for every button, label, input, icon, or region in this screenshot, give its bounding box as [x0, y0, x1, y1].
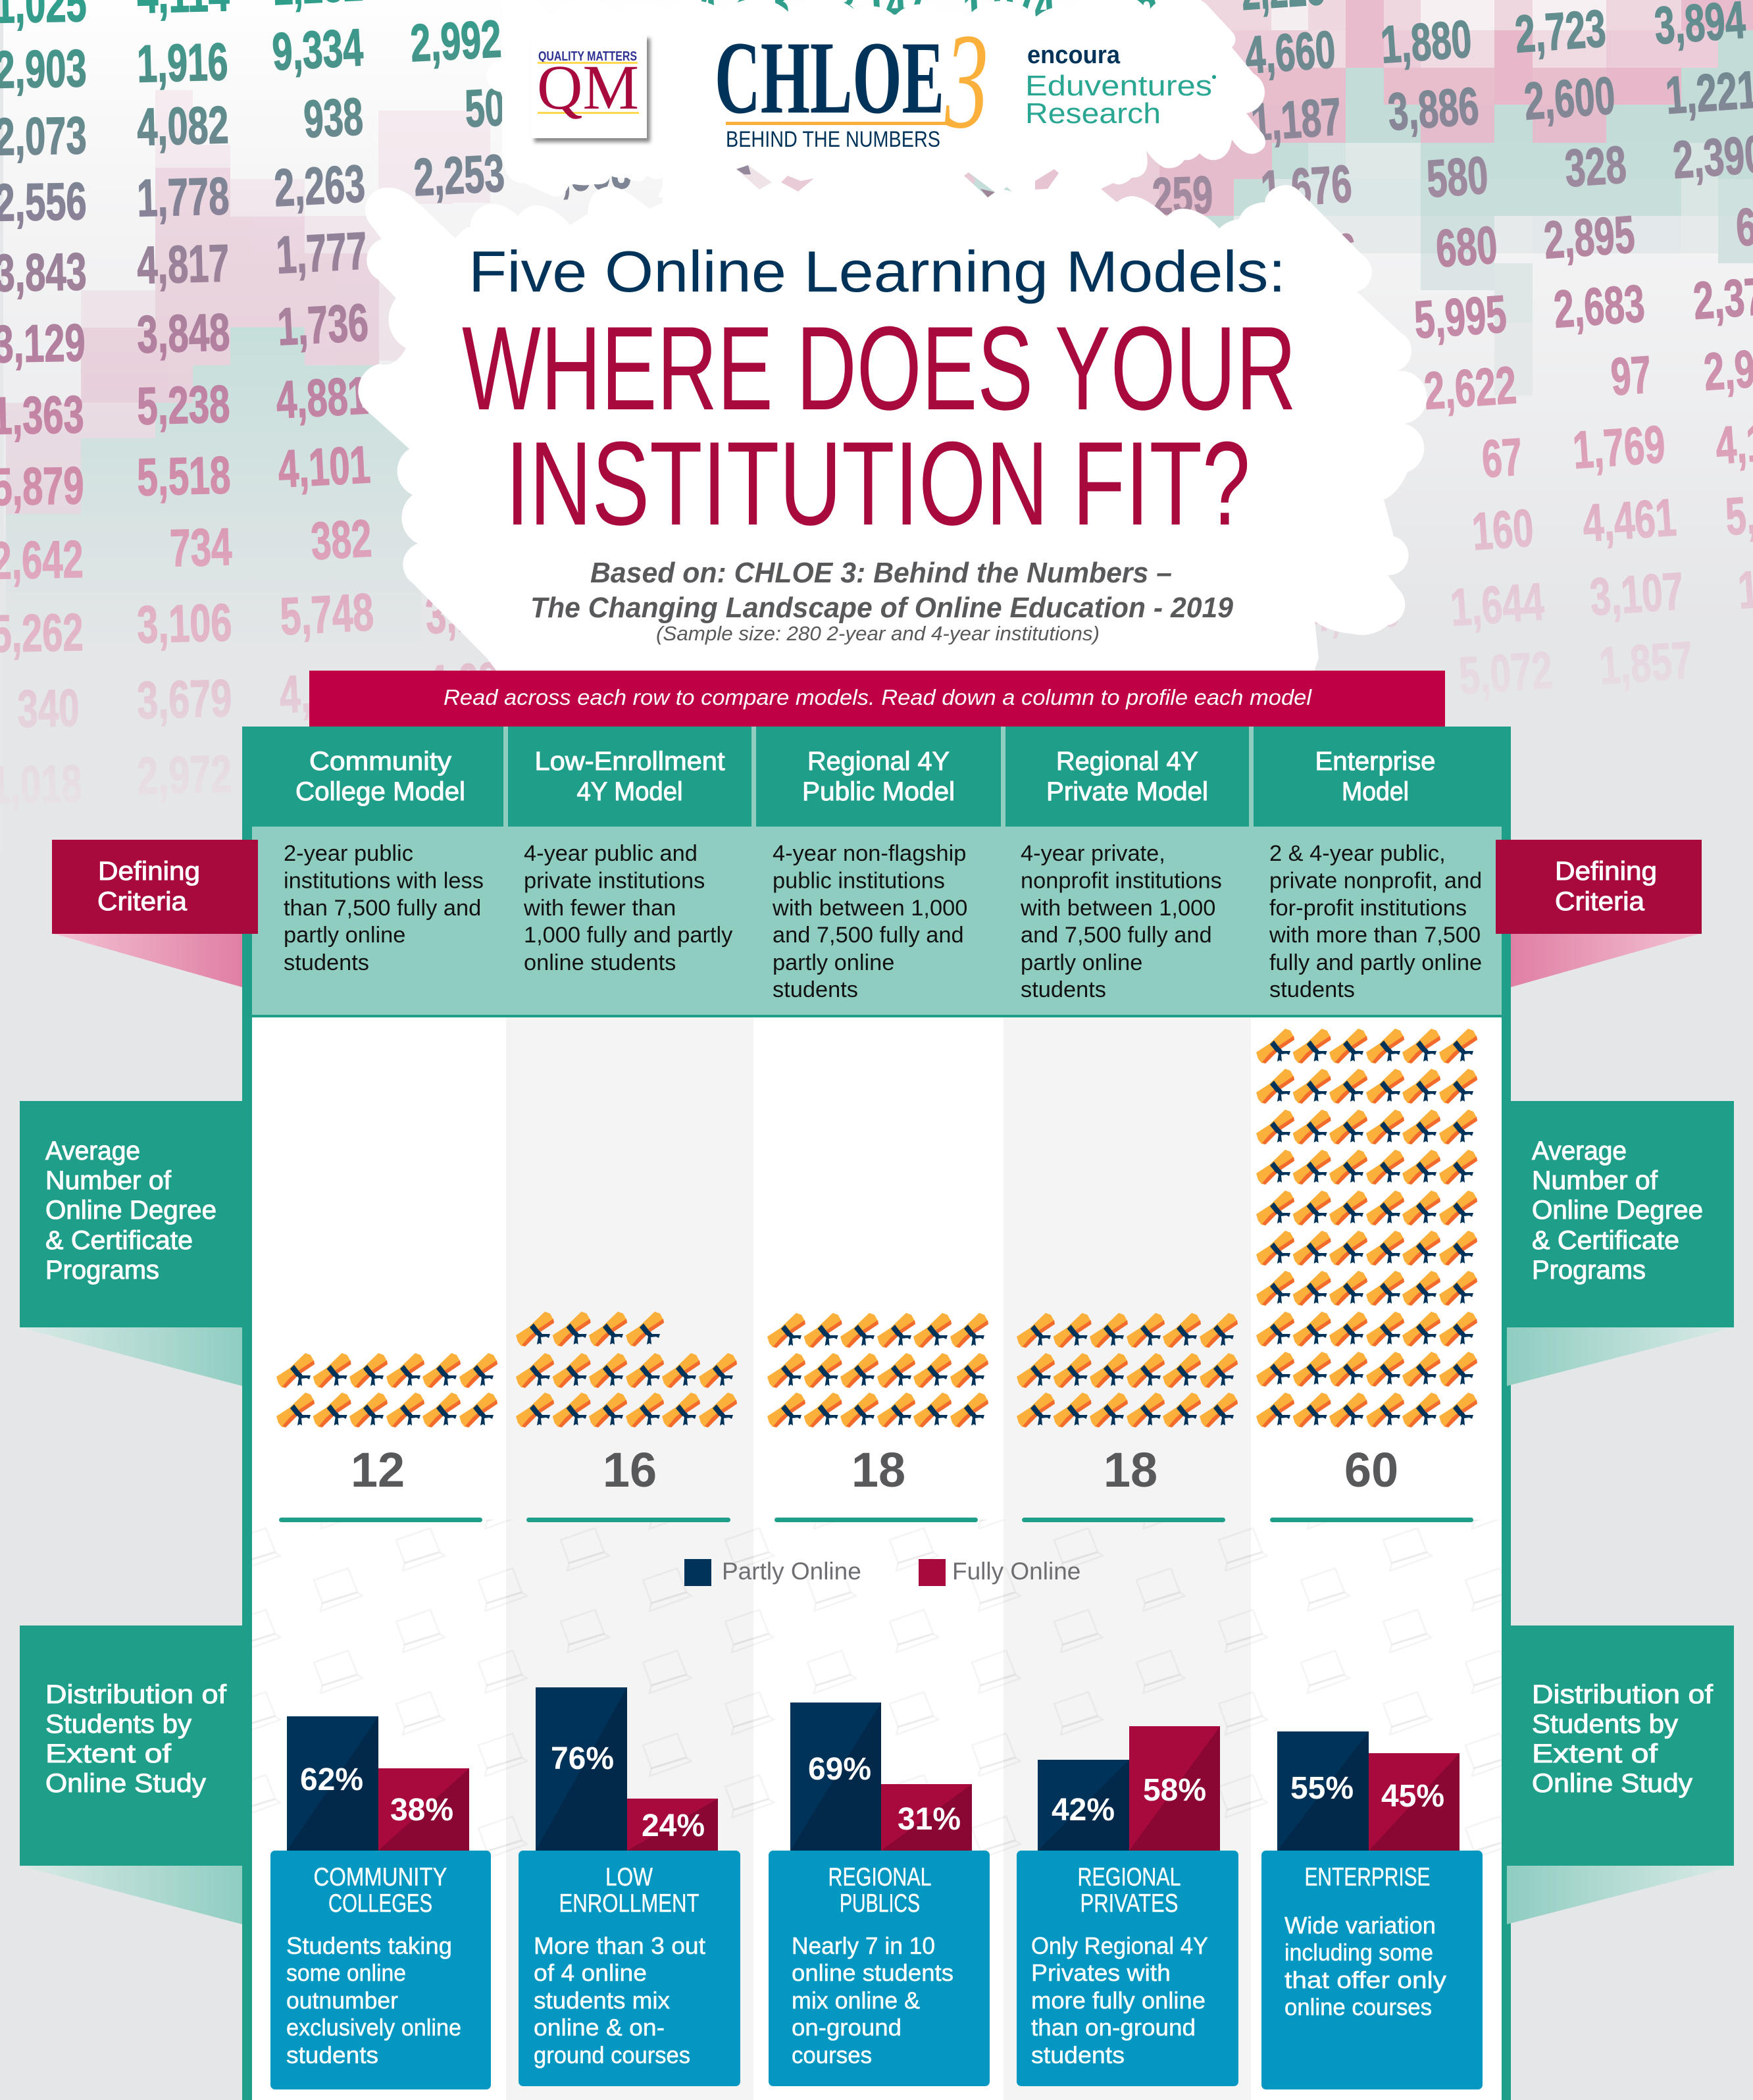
- defining criteria row: partly online: [1021, 950, 1142, 975]
- background numbers: right: 1,296: [1263, 222, 1358, 288]
- label: distribution left: Online Study: [45, 1769, 206, 1798]
- diploma pictogram: community college, 12: 12: [351, 1443, 405, 1497]
- label: average programs right: Programs: [1532, 1256, 1646, 1285]
- background numbers: left: 4,881: [274, 366, 370, 429]
- callout: regional privates: than on-ground: [1031, 2014, 1196, 2041]
- defining criteria row: and 7,500 fully and: [773, 923, 964, 948]
- background numbers: left: 505: [463, 76, 526, 138]
- callout: community colleges: COMMUNITY: [313, 1863, 447, 1891]
- defining criteria row: students: [773, 977, 858, 1002]
- bar chart: community colleges: 62%: [300, 1762, 363, 1797]
- legend: Fully Online: [952, 1558, 1080, 1585]
- callout: regional publics: [769, 1851, 990, 2086]
- label: average programs right: & Certificate: [1532, 1226, 1679, 1255]
- background numbers: left: 1,778: [136, 166, 230, 228]
- column headings: 4Y Model: [576, 777, 683, 806]
- label: average programs left: [20, 1101, 251, 1327]
- background numbers: right: 2,895: [1542, 205, 1637, 270]
- column bands: [252, 1017, 1502, 2100]
- subtitle and source: The Changing Landscape of Online Education - 2019: [530, 592, 1234, 624]
- callout: community colleges: COLLEGES: [328, 1889, 432, 1918]
- label: distribution right: [1511, 1626, 1734, 1866]
- callout: enterprise: including some: [1284, 1939, 1433, 1966]
- background data pixels: right: [1079, 0, 1753, 396]
- label: distribution right: Distribution of: [1532, 1680, 1714, 1709]
- bar chart: low enrollment: 24%: [642, 1808, 705, 1843]
- background numbers: left: 5,748: [278, 582, 375, 646]
- subtitle and source: (Sample size: 280 2-year and 4-year institutions): [656, 622, 1100, 645]
- column headings: Community: [309, 747, 451, 776]
- bar chart: low enrollment: [536, 1687, 718, 1851]
- diploma pictogram: regional private, 18: 18: [1104, 1443, 1157, 1497]
- callout: regional publics: PUBLICS: [840, 1889, 920, 1918]
- logo: Encoura Eduventures Research: [1025, 41, 1216, 130]
- logo: Encoura Eduventures Research: Eduventures: [1025, 70, 1212, 102]
- column headings: Model: [1342, 777, 1409, 806]
- diploma pictogram: enterprise, 60: 60: [1344, 1443, 1398, 1497]
- bar chart: regional privates: [1038, 1726, 1220, 1851]
- defining criteria row: [252, 827, 1502, 1015]
- background numbers: right: 1,857: [1597, 630, 1694, 696]
- label: distribution right: Students by: [1532, 1710, 1678, 1739]
- background numbers: right: 4,230: [1306, 578, 1402, 643]
- background numbers: right: 1,187: [1249, 87, 1343, 152]
- defining criteria row: and 7,500 fully and: [1021, 923, 1212, 948]
- background numbers: right: 259: [1152, 165, 1214, 226]
- label: average programs right: Number of: [1532, 1166, 1658, 1195]
- callout: regional publics: mix online &: [792, 1987, 920, 2014]
- column headings: Low-Enrollment: [534, 747, 725, 776]
- background numbers: right: 97: [1609, 345, 1653, 406]
- background numbers: left: 3,679: [136, 669, 232, 730]
- background numbers: right: 1,676: [1259, 154, 1354, 219]
- callout: low enrollment: students mix: [534, 1987, 670, 2014]
- background numbers: left: 5,238: [136, 374, 230, 436]
- bar chart: enterprise: 55%: [1290, 1771, 1354, 1806]
- logo: Encoura Eduventures Research: Research: [1025, 97, 1161, 130]
- main table frame: [242, 727, 1511, 2100]
- background numbers: right: 3,886: [1386, 76, 1481, 141]
- background numbers: left: 4,094: [278, 661, 374, 724]
- column headings: College Model: [295, 777, 465, 806]
- background numbers: right: 3,107: [1588, 561, 1685, 627]
- title: WHERE DOES YOUR: [462, 302, 1296, 435]
- callout: regional privates: more fully online: [1031, 1987, 1206, 2014]
- diploma pictogram: low enrollment, 16: [516, 1312, 737, 1522]
- background numbers: left: [0, 0, 1179, 814]
- background numbers: left: 1,916: [136, 32, 228, 93]
- background numbers: left: 4,689: [425, 650, 522, 713]
- background numbers: right: 328: [1563, 135, 1628, 197]
- bar chart: regional privates: 42%: [1052, 1793, 1115, 1828]
- callout: community colleges: Students taking: [286, 1932, 452, 1959]
- defining criteria row: 1,000 fully and partly: [524, 923, 733, 948]
- background numbers: left: 1,736: [276, 293, 370, 356]
- background numbers: left: 734: [169, 517, 233, 577]
- label: distribution left: [20, 1626, 251, 1866]
- instruction banner: [309, 671, 1445, 727]
- label: distribution left: Students by: [45, 1710, 191, 1739]
- label: defining criteria left: Criteria: [97, 887, 188, 916]
- background numbers: right: 2,378: [1296, 494, 1391, 559]
- background data pixels: left: [0, 0, 490, 856]
- defining criteria row: with between 1,000: [1020, 896, 1215, 921]
- label: distribution right: Extent of: [1532, 1739, 1658, 1768]
- background numbers: right: 4,660: [1243, 20, 1337, 85]
- callout: regional privates: Privates with: [1031, 1959, 1171, 1986]
- callout: community colleges: exclusively online: [286, 2014, 461, 2041]
- background numbers: left: 9,334: [270, 18, 365, 81]
- callout: enterprise: ENTERPRISE: [1304, 1863, 1431, 1891]
- callout: community colleges: [270, 1851, 491, 2089]
- callout: community colleges: outnumber: [286, 1987, 398, 2014]
- laptop pattern: [232, 1486, 1514, 1859]
- defining criteria row: 4-year public and: [524, 841, 698, 866]
- column headings: Private Model: [1046, 777, 1208, 806]
- column headings: Public Model: [802, 777, 955, 806]
- label: distribution right: Online Study: [1532, 1769, 1692, 1798]
- callout: enterprise: online courses: [1284, 1993, 1432, 2020]
- label: average programs left: Online Degree: [45, 1196, 216, 1225]
- defining criteria row: partly online: [773, 950, 894, 975]
- legend: Partly Online: [722, 1558, 861, 1585]
- defining criteria row: 4-year private,: [1021, 841, 1165, 866]
- bar chart: enterprise: 45%: [1381, 1779, 1444, 1814]
- background numbers: left: 4,120: [422, 219, 516, 282]
- label: distribution left: Extent of: [45, 1739, 172, 1768]
- background numbers: left: 4,817: [136, 234, 230, 295]
- diploma pictogram: community college, 12: [276, 1353, 497, 1522]
- defining criteria row: nonprofit institutions: [1021, 869, 1222, 894]
- left row connector triangles: [20, 933, 242, 1924]
- background numbers: right: 1,769: [1571, 415, 1667, 480]
- callout: regional publics: courses: [792, 2041, 872, 2068]
- defining criteria row: students: [1021, 977, 1106, 1002]
- diploma pictogram: low enrollment, 16: 16: [603, 1443, 657, 1497]
- column headings: Regional 4Y: [807, 747, 950, 776]
- defining criteria row: 2-year public: [284, 841, 413, 866]
- callout: regional privates: [1017, 1851, 1238, 2086]
- background numbers: right: 4,461: [1581, 488, 1678, 553]
- callout: regional publics: REGIONAL: [828, 1863, 932, 1891]
- background numbers: right: [1152, 0, 1753, 705]
- label: average programs left: & Certificate: [45, 1226, 193, 1255]
- label: average programs left: Number of: [45, 1166, 172, 1195]
- column headings: Enterprise: [1315, 747, 1436, 776]
- bar chart: regional publics: 31%: [898, 1802, 961, 1837]
- defining criteria row: institutions with less: [284, 869, 484, 894]
- background numbers: right: 2,600: [1522, 66, 1617, 131]
- defining criteria row: students: [284, 950, 369, 975]
- diploma pictogram: regional private, 18: [1017, 1313, 1238, 1522]
- logo: Quality Matters: QUALITY MATTERS: [538, 49, 637, 64]
- callout: community colleges: students: [286, 2041, 378, 2068]
- background numbers: left: 2,992: [409, 9, 503, 72]
- logo: CHLOE 3 Behind the Numbers: BEHIND THE NUMBERS: [726, 127, 940, 152]
- cloud gaps showing background: [736, 165, 1059, 197]
- label: average programs right: Average: [1532, 1137, 1627, 1165]
- defining criteria row: 2 & 4-year public,: [1269, 841, 1446, 866]
- callout: low enrollment: of 4 online: [534, 1959, 647, 1986]
- callout: regional publics: online students: [792, 1959, 953, 1986]
- instruction banner: Read across each row to compare models. Read down a column to profile each model: [444, 685, 1313, 709]
- background numbers: right: 2,622: [1422, 355, 1518, 421]
- bar chart: low enrollment: 76%: [551, 1741, 614, 1776]
- defining criteria row: fully and partly online: [1269, 950, 1482, 975]
- background numbers: right: 160: [1470, 498, 1535, 561]
- logo: CHLOE 3 Behind the Numbers: 3: [944, 5, 988, 157]
- column headings: Regional 4Y: [1056, 747, 1198, 776]
- background numbers: left: 4,082: [136, 95, 229, 157]
- right row connector triangles: [1507, 933, 1734, 1924]
- bar chart: regional privates: 58%: [1143, 1773, 1206, 1808]
- defining criteria row: with between 1,000: [772, 896, 967, 921]
- background numbers: right: 5,072: [1457, 640, 1554, 705]
- title: Five Online Learning Models:: [469, 239, 1286, 304]
- callout: low enrollment: ENROLLMENT: [559, 1889, 699, 1918]
- label: distribution left: Distribution of: [45, 1680, 227, 1709]
- logo: CHLOE 3 Behind the Numbers: CHLOE: [715, 20, 944, 136]
- background numbers: left: 382: [309, 509, 373, 571]
- bar chart: enterprise: [1277, 1731, 1460, 1851]
- logo: Quality Matters: QM: [537, 52, 639, 122]
- background numbers: left: 2,253: [412, 143, 506, 207]
- label: average programs right: [1511, 1101, 1734, 1327]
- label: defining criteria left: [52, 840, 258, 934]
- defining criteria row: for-profit institutions: [1269, 896, 1467, 921]
- defining criteria row: students: [1269, 977, 1355, 1002]
- background numbers: right: 1,644: [1448, 572, 1546, 637]
- defining criteria row: private institutions: [524, 869, 705, 894]
- title: INSTITUTION FIT?: [505, 417, 1250, 550]
- bar chart: community colleges: [287, 1716, 469, 1851]
- defining criteria row: 4-year non-flagship: [773, 841, 966, 866]
- defining criteria row: partly online: [284, 923, 405, 948]
- legend: [684, 1558, 1080, 1586]
- defining criteria row: than 7,500 fully and: [284, 896, 481, 921]
- callout: enterprise: [1261, 1851, 1483, 2089]
- column headings: [295, 727, 1436, 827]
- callout: low enrollment: [519, 1851, 740, 2086]
- callout: low enrollment: ground courses: [534, 2041, 690, 2068]
- diploma pictogram: regional public, 18: 18: [851, 1443, 905, 1497]
- background numbers: right: 5,995: [1412, 284, 1508, 349]
- background numbers: left: 3,508: [538, 140, 632, 203]
- background numbers: left: 3,106: [136, 593, 232, 654]
- background numbers: left: 2,972: [136, 744, 232, 806]
- bar chart: regional publics: [790, 1703, 972, 1851]
- background numbers: right: 580: [1425, 145, 1490, 208]
- logo: Encoura Eduventures Research: encoura: [1027, 41, 1121, 69]
- subtitle and source: [530, 557, 1234, 645]
- defining criteria row: with fewer than: [523, 896, 676, 921]
- background numbers: left: 3,848: [136, 303, 230, 364]
- background numbers: left: 3,102: [424, 581, 519, 644]
- bar chart: community colleges: 38%: [390, 1793, 453, 1828]
- label: average programs left: Programs: [45, 1256, 159, 1285]
- background numbers: right: 2,683: [1552, 274, 1646, 339]
- defining criteria row: with more than 7,500: [1269, 923, 1481, 948]
- callout: enterprise: Wide variation: [1284, 1912, 1436, 1939]
- defining criteria row: private nonprofit, and: [1269, 869, 1482, 894]
- white cloud behind title and logos: [358, 0, 1427, 684]
- diploma pictogram: enterprise, 60: [1256, 1029, 1477, 1522]
- label: average programs right: Online Degree: [1532, 1196, 1703, 1225]
- defining criteria row: online students: [524, 950, 676, 975]
- background numbers: left: 5,518: [136, 446, 231, 507]
- background numbers: left: 340: [17, 679, 80, 738]
- callout: low enrollment: online & on-: [534, 2014, 665, 2041]
- label: average programs left: Average: [45, 1137, 140, 1165]
- defining criteria row: public institutions: [773, 869, 945, 894]
- callout: regional publics: Nearly 7 in 10: [792, 1932, 935, 1959]
- logo: CHLOE 3 Behind the Numbers: [715, 5, 988, 157]
- callout: low enrollment: LOW: [605, 1863, 653, 1891]
- callout: regional privates: students: [1031, 2041, 1125, 2068]
- background numbers: left: 4,101: [276, 435, 372, 498]
- background numbers: left: 938: [302, 87, 365, 149]
- callout: low enrollment: More than 3 out: [534, 1932, 705, 1959]
- bar chart: regional publics: 69%: [808, 1752, 871, 1787]
- callout: regional privates: REGIONAL: [1078, 1863, 1181, 1891]
- label: defining criteria right: Criteria: [1555, 887, 1645, 916]
- label: defining criteria right: [1496, 840, 1702, 934]
- callout: community colleges: some online: [286, 1959, 406, 1986]
- background numbers: right: 680: [1434, 215, 1499, 278]
- diploma pictogram: regional public, 18: [767, 1313, 988, 1522]
- label: defining criteria left: Defining: [98, 857, 200, 886]
- logo: Quality Matters: [531, 34, 647, 138]
- callout: regional privates: PRIVATES: [1080, 1889, 1178, 1918]
- callout: regional privates: Only Regional 4Y: [1031, 1932, 1208, 1959]
- background numbers: right: 1,880: [1379, 9, 1473, 74]
- background numbers: left: 1,777: [274, 221, 368, 284]
- callout: enterprise: that offer only: [1284, 1966, 1446, 1993]
- subtitle and source: Based on: CHLOE 3: Behind the Numbers –: [590, 557, 1172, 589]
- title: [462, 239, 1296, 550]
- callout: regional publics: on-ground: [792, 2014, 902, 2041]
- background numbers: left: 2,263: [272, 154, 367, 217]
- background numbers: right: 67: [1480, 427, 1524, 488]
- label: defining criteria right: Defining: [1555, 857, 1657, 886]
